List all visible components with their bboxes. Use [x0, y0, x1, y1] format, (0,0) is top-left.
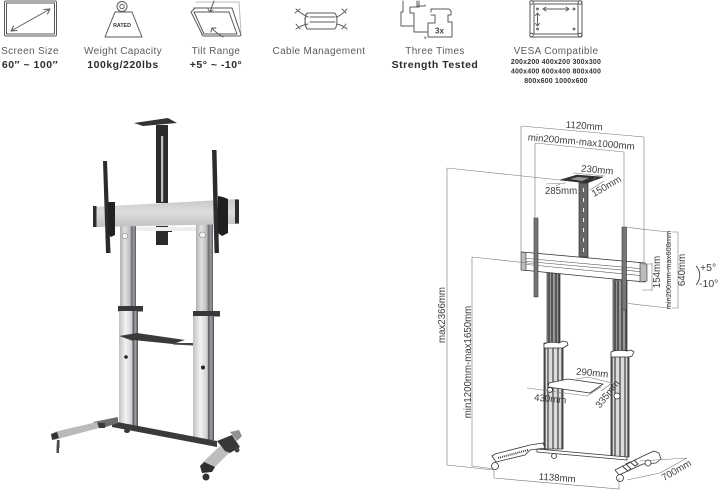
lower poles — [544, 341, 634, 457]
base — [93, 417, 217, 447]
base — [492, 443, 661, 482]
text: three times strength tested: Strength Tested — [392, 59, 478, 71]
text: weight capacity — [84, 46, 162, 71]
diagram: dimensions drawing — [437, 120, 718, 489]
text: three times strength tested — [392, 46, 478, 71]
text: VESA compatible sizes — [511, 46, 601, 85]
dimension labels: 700mm — [660, 458, 693, 484]
left VESA bracket — [103, 161, 115, 253]
left foot and caster — [51, 422, 99, 453]
dimension labels: +5° — [700, 262, 716, 274]
text: VESA compatible sizes: VESA Compatible — [514, 46, 598, 57]
crossbar end caps — [93, 200, 239, 227]
dimension labels: 285mm — [545, 186, 577, 197]
dimension labels: 430mm — [534, 393, 567, 406]
upper poles — [547, 272, 627, 352]
icon: cable management — [295, 9, 347, 29]
dimension labels: 640mm — [677, 254, 688, 286]
camera shelf — [560, 175, 603, 257]
text: tilt range: +5° ~ -10° — [190, 59, 242, 71]
dimension labels: 230mm — [581, 164, 614, 177]
crossbar — [521, 252, 647, 282]
text: three times strength tested: Three Times — [405, 46, 465, 57]
text: VESA compatible sizes: 800x600 1000x600 — [524, 78, 588, 85]
text: screen size — [1, 46, 59, 71]
text: screen size: Screen Size — [1, 46, 59, 57]
dimension labels: min200mm-max1000mm — [527, 132, 635, 153]
dimension labels: min200mm-max608mm — [664, 231, 673, 309]
icon: weight capacity: RATED — [113, 23, 131, 29]
icon: weight capacity — [105, 2, 142, 37]
icon: three times strength: 3x — [435, 26, 444, 36]
text: cable management: Cable Management — [273, 46, 365, 57]
dimension labels: 154mm — [652, 256, 663, 288]
right foot and caster — [200, 430, 242, 480]
dimension labels: 150mm — [590, 174, 623, 200]
camera shelf column — [134, 118, 177, 245]
dimension labels: 335mm — [594, 378, 622, 411]
dimension lines — [447, 126, 700, 489]
icon: screen size — [4, 1, 56, 36]
text: weight capacity: Weight Capacity — [84, 46, 162, 57]
dimension labels — [437, 120, 718, 485]
text: VESA compatible sizes: 400x400 600x400 800x400 — [511, 68, 601, 76]
text: weight capacity: 100kg/220lbs — [87, 59, 159, 71]
right VESA bracket — [212, 150, 228, 253]
stand line drawing — [492, 175, 661, 482]
dimension labels: -10° — [699, 278, 718, 290]
dimension labels: 1120mm — [565, 120, 603, 133]
text: tilt range — [190, 46, 242, 71]
dimension labels: max2366mm — [437, 287, 448, 343]
shelf — [119, 333, 193, 346]
shelf — [548, 379, 603, 393]
lower poles — [119, 311, 214, 440]
icon: tilt range — [191, 1, 241, 37]
crossbar — [94, 199, 238, 227]
dimension labels: 290mm — [576, 367, 609, 380]
right bracket — [622, 227, 626, 310]
text: VESA compatible sizes: 200x200 400x200 300x300 — [511, 59, 601, 66]
left bracket — [534, 218, 538, 297]
upper poles — [120, 223, 213, 311]
icon: three times strength — [401, 1, 452, 38]
text: screen size: 60″ ~ 100″ — [2, 59, 58, 71]
collars — [118, 306, 220, 316]
dimension labels: min1200mm-max1650mm — [463, 306, 474, 418]
photo: mobile TV stand — [51, 118, 242, 480]
text: tilt range: Tilt Range — [192, 46, 240, 57]
icon: VESA compatible — [530, 1, 582, 37]
dimension labels: 1138mm — [538, 472, 576, 485]
